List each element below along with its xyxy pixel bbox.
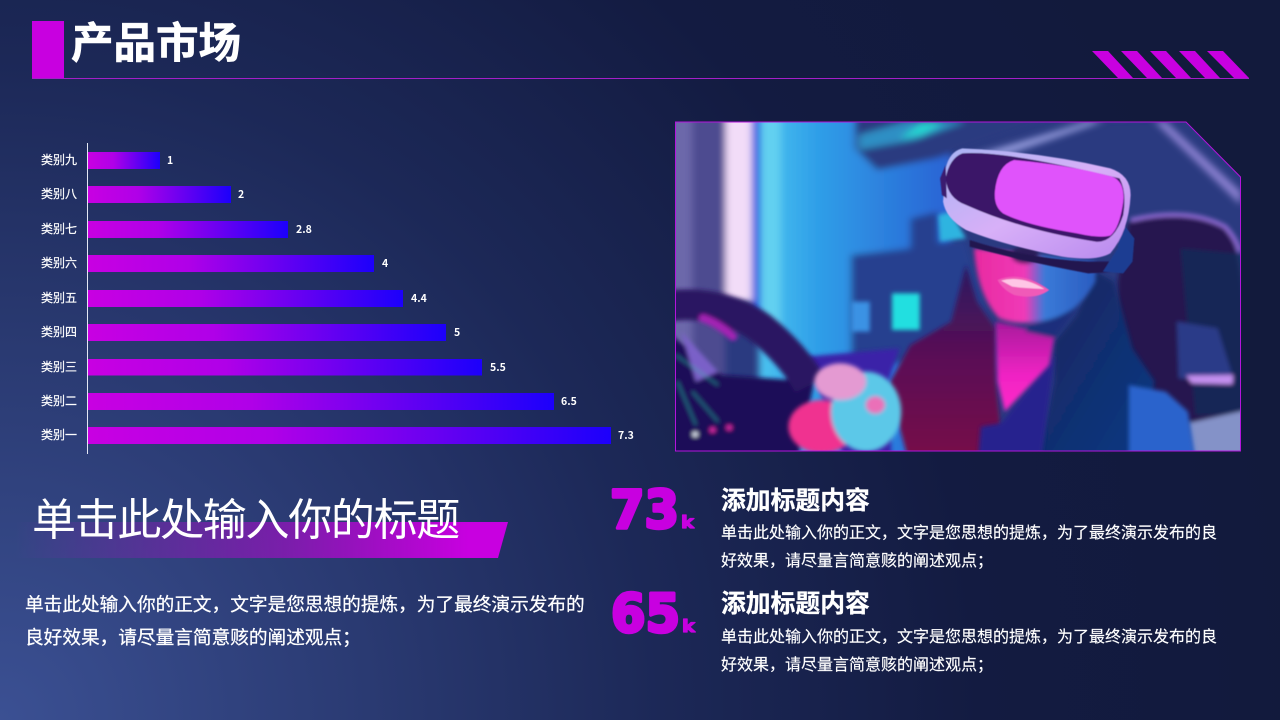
bar: 类别七: 类别七 [41, 220, 77, 237]
item 2 body text: 单击此处输入你的正文，文字是您思想的提炼，为了最终演示发布的良 [721, 629, 1217, 646]
bar: 类别八: 2 [238, 187, 244, 202]
bar: 类别二 [41, 392, 577, 410]
left body text [25, 594, 585, 648]
left body text: 单击此处输入你的正文，文字是您思想的提炼，为了最终演示发布的 [25, 594, 585, 615]
bar: 类别二: 类别二 [41, 392, 77, 409]
bar: 类别六 [41, 254, 388, 272]
photo: woman wearing a VR headset with a steering wheel [675, 122, 1241, 452]
bar: 类别七 [41, 220, 312, 238]
item 2 body text [721, 628, 1217, 674]
stat: 73k: 73 [610, 480, 679, 541]
stat: 73k: k [681, 513, 695, 533]
item 1 body text [721, 524, 1217, 570]
bar: 类别三: 类别三 [41, 358, 77, 375]
hand on the wheel [788, 363, 901, 453]
bar: 类别九: 类别九 [41, 151, 77, 168]
left body text: 良好效果，请尽量言简意赅的阐述观点； [25, 627, 361, 648]
bar: 类别一 [41, 426, 634, 444]
bar: 类别九 [41, 151, 173, 169]
bar: 类别四: 类别四 [41, 323, 77, 340]
title: 产品市场 [71, 21, 241, 68]
steering wheel [663, 305, 814, 468]
neck and face [974, 246, 1096, 412]
jacket [808, 346, 1198, 450]
item 1 body text: 单击此处输入你的正文，文字是您思想的提炼，为了最终演示发布的良 [721, 525, 1217, 542]
bar: 类别一: 类别一 [41, 426, 77, 443]
bar: 类别五: 4.4 [411, 291, 427, 306]
bar: 类别四: 5 [454, 325, 460, 340]
stat: 65k: k [682, 617, 696, 637]
heading: 单击此处输入你的标题 [32, 496, 459, 545]
bar: 类别二: 6.5 [561, 394, 577, 409]
gaming chair [1116, 210, 1240, 450]
bar: 类别八: 类别八 [41, 185, 77, 202]
item 1 heading: 添加标题内容 [721, 488, 870, 515]
bar: 类别六: 4 [382, 256, 388, 271]
item 2 body text: 好效果，请尽量言简意赅的阐述观点； [721, 657, 993, 674]
mouth [997, 277, 1049, 297]
bar: 类别三 [41, 358, 506, 376]
bar: 类别九: 1 [167, 153, 173, 168]
bar: 类别四 [41, 323, 460, 341]
bar: 类别五: 类别五 [41, 289, 77, 306]
item 1 body text: 好效果，请尽量言简意赅的阐述观点； [721, 553, 993, 570]
bar: 类别一: 7.3 [618, 428, 634, 443]
bar: 类别七: 2.8 [296, 222, 312, 237]
bar: 类别八 [41, 185, 244, 203]
bar: 类别五 [41, 289, 427, 307]
bar: 类别六: 类别六 [41, 254, 77, 271]
VR headset [940, 148, 1134, 273]
bar: 类别三: 5.5 [490, 360, 506, 375]
stat: 65k: 65 [611, 584, 680, 645]
hair [888, 265, 1155, 468]
item 2 heading: 添加标题内容 [721, 591, 870, 618]
